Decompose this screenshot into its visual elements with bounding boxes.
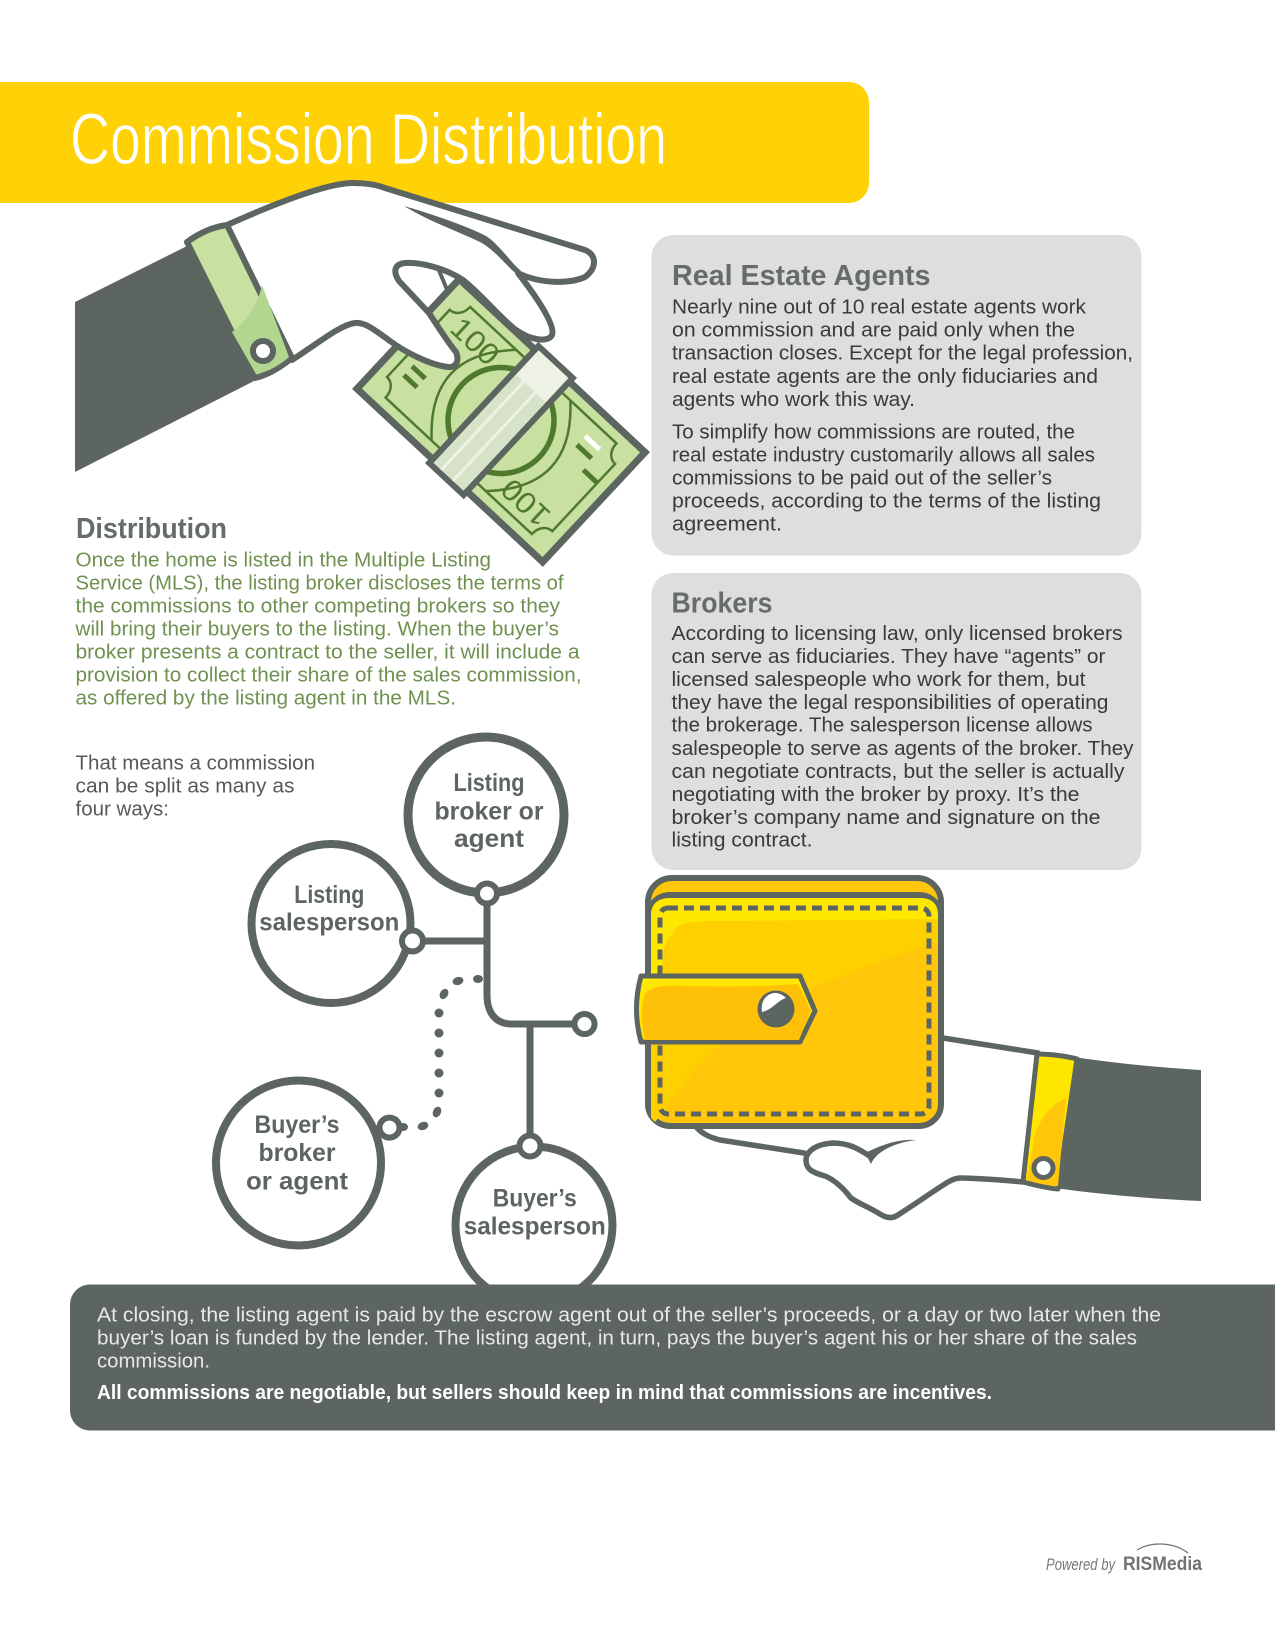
paragraph: can serve as fiduciaries. They have “agents” or — [672, 645, 1106, 668]
paragraph two — [672, 420, 1101, 536]
closing text: At closing, the listing agent is paid by the escrow agent out of the seller’s proceeds, or a day or two later when the — [97, 1303, 1161, 1326]
banknote — [354, 275, 648, 566]
circle: buyer's salesperson: salesperson — [464, 1213, 606, 1241]
note arcs — [409, 328, 593, 513]
title banner — [0, 82, 869, 203]
highlight mark — [585, 436, 600, 450]
note inner border — [376, 298, 626, 543]
panel: real estate agents — [652, 235, 1142, 556]
heading: Brokers — [672, 587, 772, 619]
illustration: hand holding wallet — [636, 878, 1201, 1218]
paragraph one — [672, 295, 1133, 411]
circle: listing broker or agent: broker or — [434, 798, 544, 826]
note centre circle — [426, 346, 576, 495]
wallet highlight: yellow top — [651, 898, 938, 990]
paragraph: they have the legal responsibilities of operating — [672, 691, 1108, 714]
circle: buyer's broker or agent — [216, 1080, 381, 1246]
wallet clasp — [636, 976, 815, 1042]
paragraph one: on commission and are paid only when the — [672, 318, 1075, 341]
paragraph one: transaction closes. Except for the legal profession, — [672, 341, 1133, 364]
circle: buyer's salesperson — [456, 1146, 612, 1304]
hand — [697, 1000, 1038, 1218]
logo: powered by rismedia: Powered by — [1046, 1555, 1116, 1574]
sleeve — [1055, 1057, 1201, 1201]
paragraph two: To simplify how commissions are routed, the — [672, 420, 1075, 443]
paragraph: salespeople to serve as agents of the broker. They — [672, 737, 1134, 760]
text: four ways intro — [76, 751, 315, 821]
hand outline — [697, 1038, 1038, 1218]
thumb crease — [865, 1140, 916, 1164]
circle: buyer's broker or agent: Buyer’s — [254, 1111, 340, 1139]
paragraph: According to licensing law, only licensed brokers — [672, 622, 1122, 645]
paragraph two: agreement. — [672, 513, 782, 536]
circle: listing salesperson: salesperson — [259, 908, 399, 936]
title: Commission Distribution — [70, 100, 667, 180]
wallet back — [648, 878, 941, 1126]
text: distribution body: as offered by the listing agent in the MLS. — [76, 686, 456, 709]
closing text: commission. — [97, 1349, 210, 1372]
hand back and fingers — [227, 183, 594, 340]
illustration: hand holding money — [75, 183, 648, 566]
paragraph one: real estate agents are the only fiduciaries and — [672, 365, 1098, 388]
diagram: commission split — [216, 737, 612, 1304]
circle: listing salesperson: Listing — [294, 881, 364, 909]
circle: listing broker or agent — [408, 737, 564, 893]
closing text — [97, 1303, 1161, 1372]
note marks — [404, 326, 606, 521]
wallet front — [648, 895, 941, 1126]
paragraph: the brokerage. The salesperson license allows — [672, 714, 1092, 737]
paragraph: listing contract. — [672, 829, 812, 852]
dotted connector — [398, 975, 483, 1132]
text: distribution body: Service (MLS), the listing broker discloses the terms of — [76, 571, 564, 594]
text: four ways intro: That means a commission — [76, 751, 315, 774]
circle: listing broker or agent: agent — [454, 825, 525, 853]
sleeve — [75, 246, 256, 472]
logo: powered by rismedia: RISMedia — [1123, 1553, 1202, 1575]
paragraph one: Nearly nine out of 10 real estate agents work — [672, 295, 1087, 318]
paragraph two: proceeds, according to the terms of the listing — [672, 489, 1101, 512]
denomination bottom: 100 — [495, 472, 557, 533]
text: distribution body: the commissions to other competing brokers so they — [76, 594, 561, 617]
logo: powered by rismedia — [1046, 1544, 1202, 1575]
circle: listing broker or agent: Listing — [454, 769, 524, 797]
paper band — [429, 346, 573, 495]
text: distribution body: broker presents a contract to the seller, it will include a — [76, 640, 580, 663]
closing statement: All commissions are negotiable, but sellers should keep in mind that commissions are incentives. — [97, 1381, 992, 1404]
circle: buyer's broker or agent: or agent — [246, 1168, 349, 1196]
denomination top: 100 — [444, 311, 506, 372]
connector nodes — [380, 884, 594, 1156]
text: four ways intro: four ways: — [76, 798, 169, 821]
text: distribution body — [74, 548, 582, 709]
palm over note — [292, 281, 457, 367]
circle: buyer's broker or agent: broker — [258, 1139, 336, 1167]
paragraph two: real estate industry customarily allows all sales — [672, 443, 1095, 466]
text: distribution body: will bring their buyers to the listing. When the buyer’s — [74, 617, 559, 640]
stitching — [660, 908, 929, 1114]
text: distribution body: provision to collect their share of the sales commission, — [76, 663, 582, 686]
index finger crease — [404, 206, 521, 275]
heading: Real Estate Agents — [672, 260, 930, 292]
paragraph — [672, 622, 1134, 852]
connector lines — [412, 893, 575, 1145]
circle: listing salesperson — [252, 844, 410, 1003]
cuff — [187, 225, 292, 378]
panel: brokers — [652, 573, 1142, 870]
paragraph: negotiating with the broker by proxy. It’s the — [672, 783, 1080, 806]
paragraph: can negotiate contracts, but the seller is actually — [672, 760, 1125, 783]
circle: buyer's salesperson: Buyer’s — [493, 1184, 577, 1212]
wallet highlight: mid tone — [651, 919, 938, 1122]
wallet — [636, 878, 941, 1126]
paragraph: broker’s company name and signature on the — [672, 806, 1100, 829]
text: four ways intro: can be split as many as — [76, 774, 294, 797]
paragraph: licensed salespeople who work for them, but — [672, 668, 1086, 691]
panel: closing note — [70, 1284, 1275, 1430]
cuff — [1023, 1054, 1077, 1189]
clasp button — [758, 990, 794, 1028]
closing text: buyer’s loan is funded by the lender. The listing agent, in turn, pays the buyer’s agent his or her share of the sales — [97, 1326, 1137, 1349]
heading: distribution: Distribution — [76, 513, 227, 545]
text: distribution body: Once the home is listed in the Multiple Listing — [76, 548, 491, 571]
finger gap line — [438, 268, 448, 292]
paragraph two: commissions to be paid out of the seller’s — [672, 466, 1052, 489]
paragraph one: agents who work this way. — [672, 388, 915, 411]
